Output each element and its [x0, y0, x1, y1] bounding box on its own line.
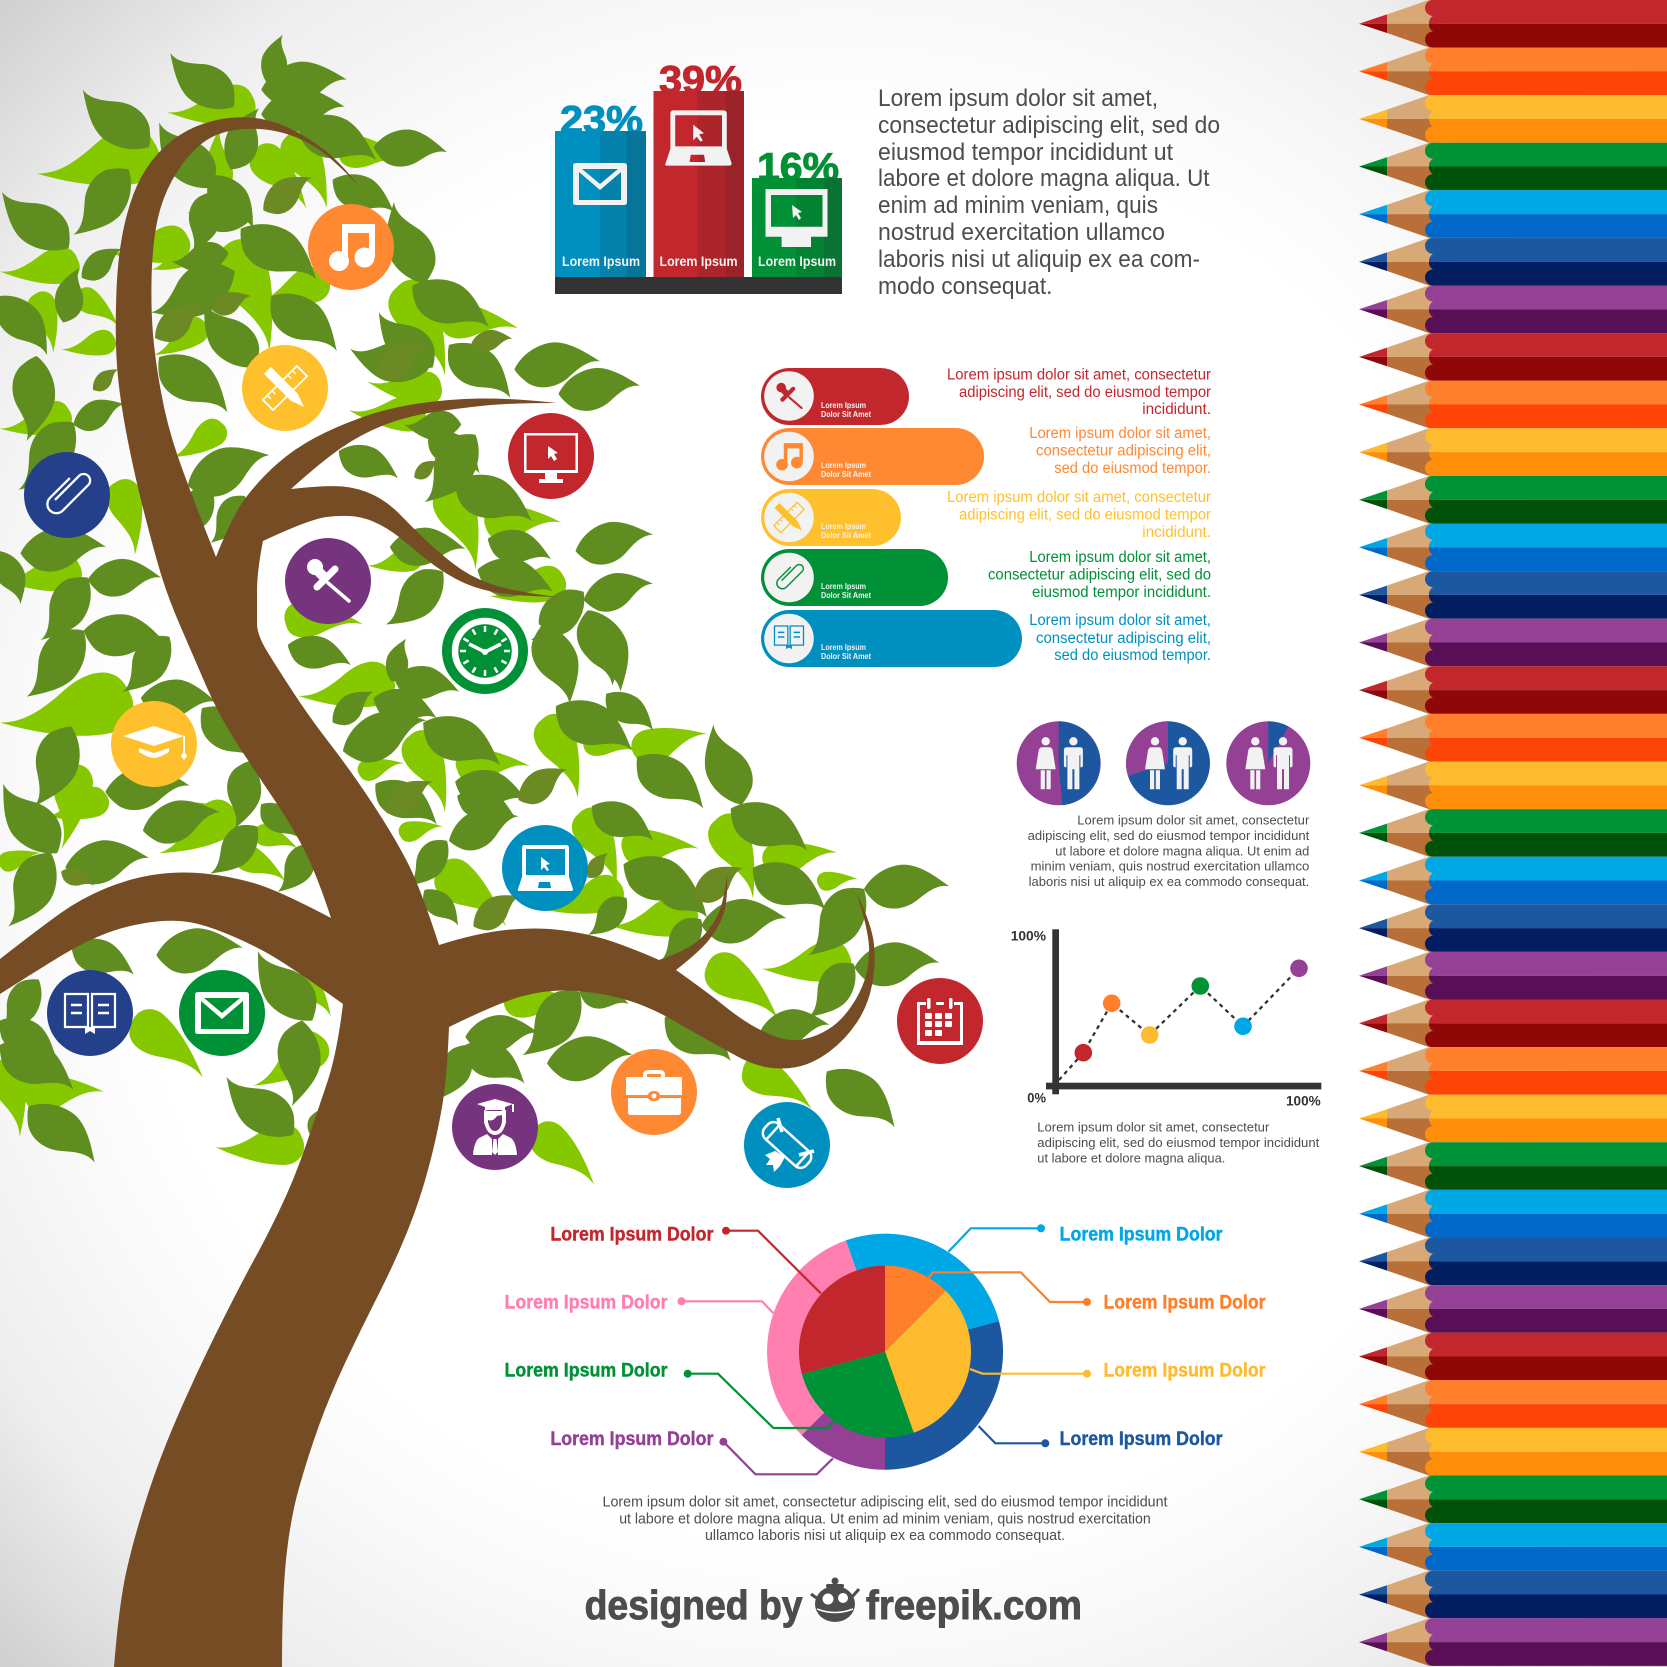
- pill: ruler: incididunt.: [1142, 524, 1211, 541]
- tree foliage: [0, 31, 950, 1197]
- pill: ruler: Lorem ipsum dolor sit amet, consectetur: [947, 489, 1211, 506]
- line chart: 100%: [1011, 928, 1047, 944]
- icon: ruler and pencil: [242, 345, 328, 431]
- bar: 39%: 39%: [659, 59, 742, 102]
- pill: note: Dolor Sit Amet: [821, 469, 871, 479]
- pill: pin: incididunt.: [1142, 401, 1211, 418]
- pill: book: consectetur adipiscing elit,: [1036, 630, 1211, 647]
- line chart caption: adipiscing elit, sed do eiusmod tempor incididunt: [1037, 1135, 1320, 1150]
- pie caption: Lorem ipsum dolor sit amet, consectetur adipiscing elit, sed do eiusmod tempor incididunt: [602, 1495, 1168, 1511]
- intro paragraph: labore et dolore magna aliqua. Ut: [878, 165, 1210, 192]
- footer credit: designed by: [585, 1582, 803, 1628]
- pill: clip: [761, 549, 1211, 606]
- icon: open book: [47, 970, 133, 1056]
- donut pie chart: [678, 1224, 1091, 1474]
- icon: diploma: [744, 1102, 830, 1188]
- pill: clip: consectetur adipiscing elit, sed do: [988, 566, 1211, 584]
- pie labels: Lorem Ipsum Dolor: [550, 1429, 714, 1450]
- bar: 23%: Lorem Ipsum: [562, 253, 640, 269]
- gender caption: Lorem ipsum dolor sit amet, consectetur: [1077, 812, 1310, 827]
- footer credit: freepik.com: [866, 1582, 1082, 1628]
- pencils column: [1359, 0, 1667, 1666]
- icon: envelope: [179, 970, 265, 1056]
- icon: briefcase: [611, 1049, 697, 1135]
- tree trunk and branches: [0, 117, 875, 1667]
- icon: calendar: [897, 978, 983, 1064]
- icon: paperclip: [24, 452, 110, 538]
- pill: pin: Lorem Ipsum: [821, 400, 866, 410]
- line chart caption: [1037, 1120, 1320, 1165]
- gender caption: minim veniam, quis nostrud exercitation ullamco: [1031, 858, 1309, 873]
- pill: ruler: adipiscing elit, sed do eiusmod tempor: [959, 506, 1211, 524]
- pill: pin: Dolor Sit Amet: [821, 409, 871, 419]
- icon: monitor: [508, 413, 594, 499]
- pill: ruler: Lorem Ipsum: [821, 521, 866, 531]
- pill: book: Dolor Sit Amet: [821, 651, 871, 661]
- intro paragraph: laboris nisi ut aliquip ex ea com-: [878, 246, 1200, 273]
- gender caption: [1028, 812, 1310, 889]
- pie labels: Lorem Ipsum Dolor: [504, 1293, 668, 1314]
- pill: clip: eiusmod tempor incididunt.: [1032, 584, 1211, 601]
- pie: mostly purple: [1226, 721, 1310, 805]
- pie labels: Lorem Ipsum Dolor: [1060, 1429, 1223, 1450]
- pill: book: Lorem ipsum dolor sit amet,: [1029, 612, 1211, 629]
- pill: clip: Dolor Sit Amet: [821, 590, 871, 600]
- bar: 16%: [752, 146, 842, 277]
- bar: 23%: 23%: [560, 99, 643, 142]
- line chart caption: ut labore et dolore magna aliqua.: [1037, 1150, 1225, 1165]
- pill: note: [761, 425, 1211, 485]
- pill: book: sed do eiusmod tempor.: [1054, 647, 1211, 664]
- line chart caption: Lorem ipsum dolor sit amet, consectetur: [1037, 1120, 1270, 1135]
- leader lines: [682, 1228, 1087, 1474]
- pill: book: [761, 610, 1211, 667]
- pie labels: Lorem Ipsum Dolor: [504, 1361, 668, 1382]
- pill: pin: adipiscing elit, sed do eiusmod tempor: [959, 384, 1211, 401]
- icon: freepik mascot: [811, 1578, 859, 1622]
- icon: laptop: [502, 825, 588, 911]
- intro paragraph: Lorem ipsum dolor sit amet,: [878, 85, 1158, 112]
- pill list: [761, 366, 1211, 667]
- pill: note: Lorem ipsum dolor sit amet,: [1029, 425, 1211, 442]
- pie: near even split: [1017, 721, 1101, 805]
- icon: pin: [285, 538, 371, 624]
- pill: pin: [761, 366, 1211, 425]
- pill: ruler: [761, 489, 1211, 546]
- pie labels: Lorem Ipsum Dolor: [550, 1225, 714, 1246]
- pie caption: ut labore et dolore magna aliqua. Ut enim ad minim veniam, quis nostrud exercitation: [619, 1511, 1151, 1527]
- bar: 16%: 16%: [757, 146, 839, 189]
- pill: clip: Lorem Ipsum: [821, 581, 866, 591]
- pie labels: Lorem Ipsum Dolor: [1104, 1361, 1266, 1382]
- intro paragraph: [878, 85, 1220, 300]
- pill: note: sed do eiusmod tempor.: [1054, 460, 1211, 477]
- intro paragraph: modo consequat.: [878, 273, 1052, 300]
- footer credit: [585, 1578, 1082, 1628]
- bar: 23%: [555, 99, 646, 277]
- pill: note: consectetur adipiscing elit,: [1036, 442, 1211, 460]
- pie: mostly blue: [1126, 721, 1210, 805]
- bar: 39%: [654, 59, 744, 277]
- bar: 39%: Lorem Ipsum: [660, 253, 738, 269]
- pill: note: Lorem Ipsum: [821, 460, 866, 470]
- pill: pin: Lorem ipsum dolor sit amet, consectetur: [947, 366, 1211, 384]
- icon: graduate: [452, 1084, 538, 1170]
- gender pies: [1017, 721, 1310, 805]
- icon: music: [308, 204, 394, 290]
- pill: clip: Lorem ipsum dolor sit amet,: [1029, 549, 1211, 566]
- line chart: 100%: [1286, 1093, 1321, 1109]
- icon: clock: [442, 608, 528, 694]
- intro paragraph: nostrud exercitation ullamco: [878, 219, 1165, 246]
- line chart: [1011, 928, 1321, 1109]
- pill: book: Lorem Ipsum: [821, 642, 866, 652]
- gender caption: laboris nisi ut aliquip ex ea commodo consequat.: [1029, 874, 1309, 889]
- intro paragraph: consectetur adipiscing elit, sed do: [878, 112, 1220, 139]
- pie caption: [602, 1495, 1168, 1544]
- line chart: 0%: [1027, 1090, 1047, 1106]
- gender caption: ut labore et dolore magna aliqua. Ut enim ad: [1055, 843, 1309, 858]
- intro paragraph: eiusmod tempor incididunt ut: [878, 139, 1173, 166]
- pie labels: Lorem Ipsum Dolor: [1104, 1293, 1266, 1314]
- gender caption: adipiscing elit, sed do eiusmod tempor incididunt: [1028, 828, 1310, 843]
- pie caption: ullamco laboris nisi ut aliquip ex ea commodo consequat.: [705, 1528, 1065, 1544]
- bar: 16%: Lorem Ipsum: [758, 253, 836, 269]
- pie labels: [504, 1225, 1266, 1450]
- bar chart: [555, 59, 842, 294]
- intro paragraph: enim ad minim veniam, quis: [878, 192, 1158, 219]
- pie labels: Lorem Ipsum Dolor: [1060, 1225, 1223, 1246]
- icon: graduation cap: [111, 701, 197, 787]
- pill: ruler: Dolor Sit Amet: [821, 530, 871, 540]
